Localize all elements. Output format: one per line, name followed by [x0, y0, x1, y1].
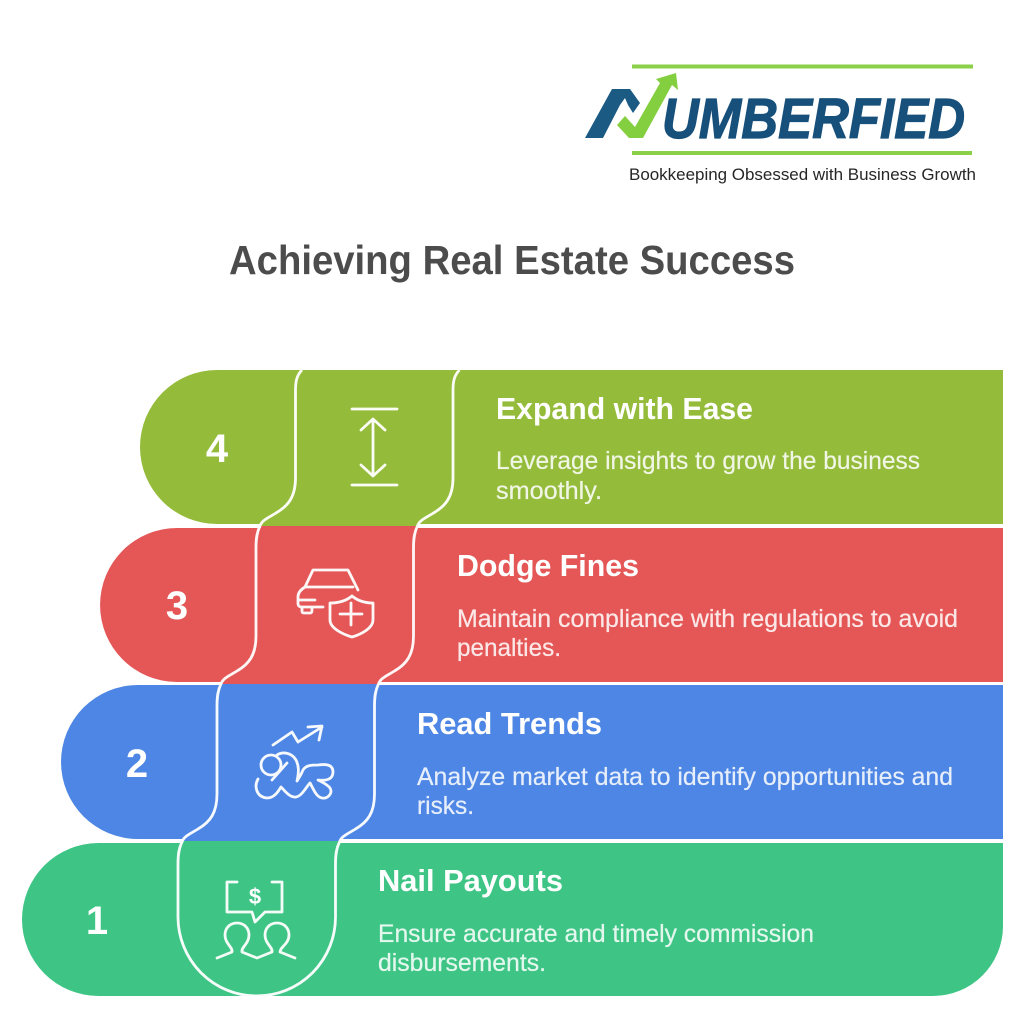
panel: step 2 background [61, 685, 1003, 839]
description: step 3: Maintain compliance with regulations to avoid [457, 605, 958, 633]
connector: white seam curves around the icon column [178, 370, 460, 996]
step 4 content [206, 391, 927, 505]
logo top rule [632, 64, 973, 68]
description: step 4: Leverage insights to grow the business [496, 447, 920, 475]
panel: step 4 background [140, 370, 1003, 524]
step 2 content [126, 706, 960, 820]
logo tagline: Bookkeeping Obsessed with Business Growth [629, 166, 976, 184]
icon: car with shield [298, 570, 373, 637]
number 1: 1 [86, 899, 108, 943]
logo mark: green check arrow [617, 73, 678, 138]
icon: payout chat with two people [217, 882, 295, 958]
number 4: 4 [206, 427, 229, 471]
icon: expand arrows [352, 409, 397, 485]
icon: trend analysis figure [256, 726, 333, 798]
logo mark: blue chevron [585, 89, 640, 138]
step 3 content [166, 548, 965, 662]
heading: Nail Payouts: Nail Payouts [378, 863, 563, 898]
description: step 2: risks. [417, 792, 474, 820]
description: step 1: disbursements. [378, 949, 546, 977]
panel: step 3 background [100, 528, 1003, 682]
middle column joins between steps [183, 524, 418, 843]
logo bottom rule [632, 151, 972, 155]
description: step 2: Analyze market data to identify opportunities and [417, 763, 953, 791]
heading: Dodge Fines: Dodge Fines [457, 548, 639, 583]
step 1 content [86, 863, 821, 977]
title: Achieving Real Estate Success [229, 237, 795, 283]
logo: Numberfied [585, 64, 976, 184]
number 3: 3 [166, 584, 188, 628]
heading: Read Trends: Read Trends [417, 706, 602, 741]
description: step 1: Ensure accurate and timely commission [378, 920, 814, 948]
panel: step 1 background [22, 843, 1003, 996]
description: step 3: penalties. [457, 634, 561, 662]
description: step 4: smoothly. [496, 477, 602, 505]
number 2: 2 [126, 742, 148, 786]
icon glyph: dollar sign: $ [249, 884, 261, 909]
heading: Expand with Ease: Expand with Ease [496, 391, 753, 426]
logo wordmark: UMBERFIED [662, 87, 965, 151]
